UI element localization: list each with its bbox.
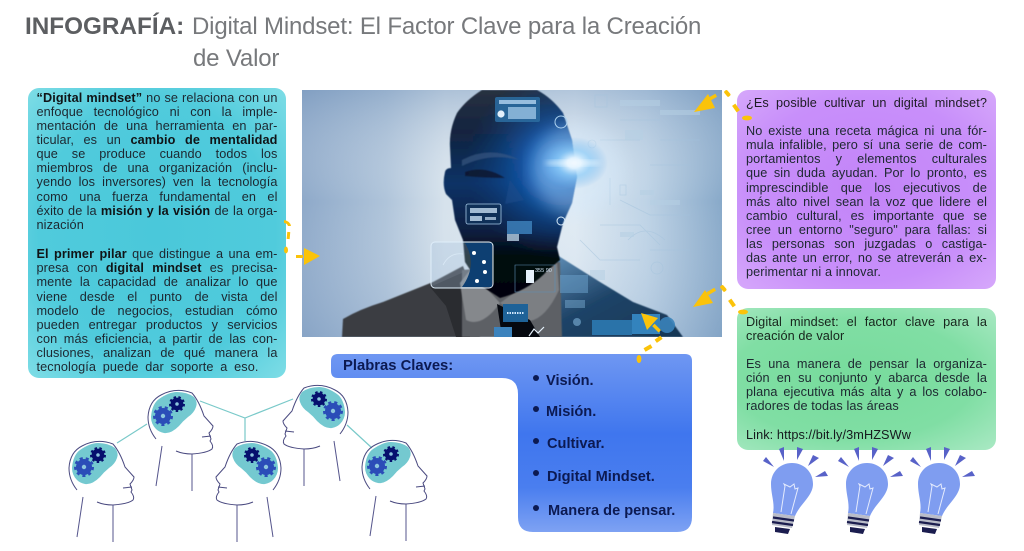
head 4 xyxy=(283,385,348,486)
panel: palabras claves: Digital Mindset. xyxy=(547,469,655,485)
light flare xyxy=(540,137,608,189)
panel: palabras claves: Misión. xyxy=(546,404,596,420)
panel: factor clave y link: Link: https://bit.ly/3mHZSWw xyxy=(746,428,911,442)
panel: cultivar digital mindset: imprescindible que los ejecutivos de xyxy=(746,181,987,195)
panel: digital mindset definition: ticular, es un cambio de mentalidad xyxy=(36,133,278,147)
head silhouette xyxy=(444,90,577,298)
data widgets: 355 90 xyxy=(535,268,552,274)
panel: palabras claves xyxy=(331,354,692,532)
bulb 2 xyxy=(838,447,903,534)
head 2 xyxy=(148,390,213,491)
head 3 xyxy=(216,441,281,542)
panel: palabras claves: Manera de pensar. xyxy=(548,503,675,519)
panel: digital mindset definition: mentación de una herramienta en par- xyxy=(36,119,278,133)
panel: palabras claves: Visión. xyxy=(546,373,594,389)
suit right with data xyxy=(530,255,683,337)
bulb 3 xyxy=(910,447,975,534)
arrow: left panel to photo xyxy=(284,220,320,265)
panel: digital mindset definition: miembros de una organización (inclu- xyxy=(36,161,278,175)
panel: digital mindset definition: viene desde el punto de vista del xyxy=(36,290,278,304)
panel: digital mindset definition: “Digital mindset” no se relaciona con un xyxy=(36,91,278,105)
panel: digital mindset definition: presa con digital mindset es precisa- xyxy=(36,261,278,275)
panel: cultivar digital mindset: mula infalible, pero sí una serie de com- xyxy=(746,138,987,152)
panel: cultivar digital mindset: portamientos y elementos culturales xyxy=(746,152,987,166)
panel: digital mindset definition: mente la capacidad de analizar lo que xyxy=(36,275,278,289)
panel: palabras claves: Plabras Claves: xyxy=(343,358,453,374)
arrow: photo to purple panel xyxy=(694,89,752,120)
panel: factor clave y link: radores de todas las áreas xyxy=(746,399,899,413)
panel: digital mindset definition: que se produce cuando todos los xyxy=(36,147,278,161)
panel: cultivar digital mindset: ¿Es posible cultivar un digital mindset? xyxy=(746,96,987,110)
panel: digital mindset definition xyxy=(28,88,286,378)
arrow: keywords to photo xyxy=(637,313,663,363)
tie xyxy=(497,304,540,337)
panel: palabras claves: Cultivar. xyxy=(547,436,605,452)
background xyxy=(302,90,722,337)
title xyxy=(25,12,701,72)
panel: digital mindset definition: nización xyxy=(36,218,84,232)
panel shape xyxy=(331,354,692,532)
panel: digital mindset definition: con más eficiencia, a partir de las con- xyxy=(36,332,278,346)
panel: factor clave y link: plana ejecutiva más alta y a los colabo- xyxy=(746,385,987,399)
faint tech pattern xyxy=(580,95,700,274)
panel: cultivar digital mindset xyxy=(737,90,996,289)
panel: cultivar digital mindset: No existe una receta mágica ni una fór- xyxy=(746,124,987,138)
arrow: photo to green panel xyxy=(693,284,748,314)
head 5 xyxy=(362,440,427,541)
suit left xyxy=(342,266,480,337)
photo: digital head xyxy=(302,90,722,337)
panel: cultivar digital mindset: cambio cultural, es importante que se xyxy=(746,209,987,223)
panel: cultivar digital mindset: das ante un error, no se atreverán a ex- xyxy=(746,251,987,265)
title: INFOGRAFÍA: xyxy=(25,13,184,40)
shirt and collar xyxy=(462,262,562,337)
title: Digital Mindset: El Factor Clave para la Creación xyxy=(192,13,701,40)
panel: digital mindset definition: El primer pilar que distingue a una em- xyxy=(36,247,278,261)
panel: cultivar digital mindset: más alto nivel sean la voz que lidere el xyxy=(746,195,987,209)
connector lines xyxy=(117,399,372,448)
panel: factor clave y link xyxy=(737,308,996,450)
panel: digital mindset definition: yendo los inversores) ven la tecnología xyxy=(36,175,278,189)
panel: digital mindset definition: modelo de negocios, estudian cómo xyxy=(36,304,278,318)
title: de Valor xyxy=(193,45,279,72)
data widgets xyxy=(431,97,675,337)
panel: factor clave y link: Digital mindset: el factor clave para la xyxy=(746,315,987,329)
panel: digital mindset definition: pueden entregar productos y servicios xyxy=(36,318,278,332)
panel: cultivar digital mindset: que sin duda ayudan. Por lo pronto, es xyxy=(746,166,987,180)
panel: digital mindset definition: éxito de la misión y la visión de la orga- xyxy=(36,204,278,218)
panel: cultivar digital mindset: las personas son juzgadas o castiga- xyxy=(746,237,987,251)
panel: cultivar digital mindset: perimentar ni a innovar. xyxy=(746,265,881,279)
panel: digital mindset definition: como una fuerza fundamental en el xyxy=(36,190,278,204)
panel: factor clave y link: ción en su conjunto y abarca desde la xyxy=(746,371,987,385)
panel: cultivar digital mindset: cree un entorno "seguro" para fallas: si xyxy=(746,223,987,237)
panel: digital mindset definition: tecnología puede dar soporte a eso. xyxy=(36,360,258,374)
panel: digital mindset definition: enfoque tecnológico ni con la imple- xyxy=(36,105,278,119)
panel: digital mindset definition: clusiones, analizan de qué manera la xyxy=(36,346,278,360)
panel: factor clave y link: Es una manera de pensar la organiza- xyxy=(746,357,987,371)
panel: factor clave y link: creación de valor xyxy=(746,329,844,343)
bulb 1 xyxy=(763,447,828,534)
head 1 xyxy=(69,441,134,542)
